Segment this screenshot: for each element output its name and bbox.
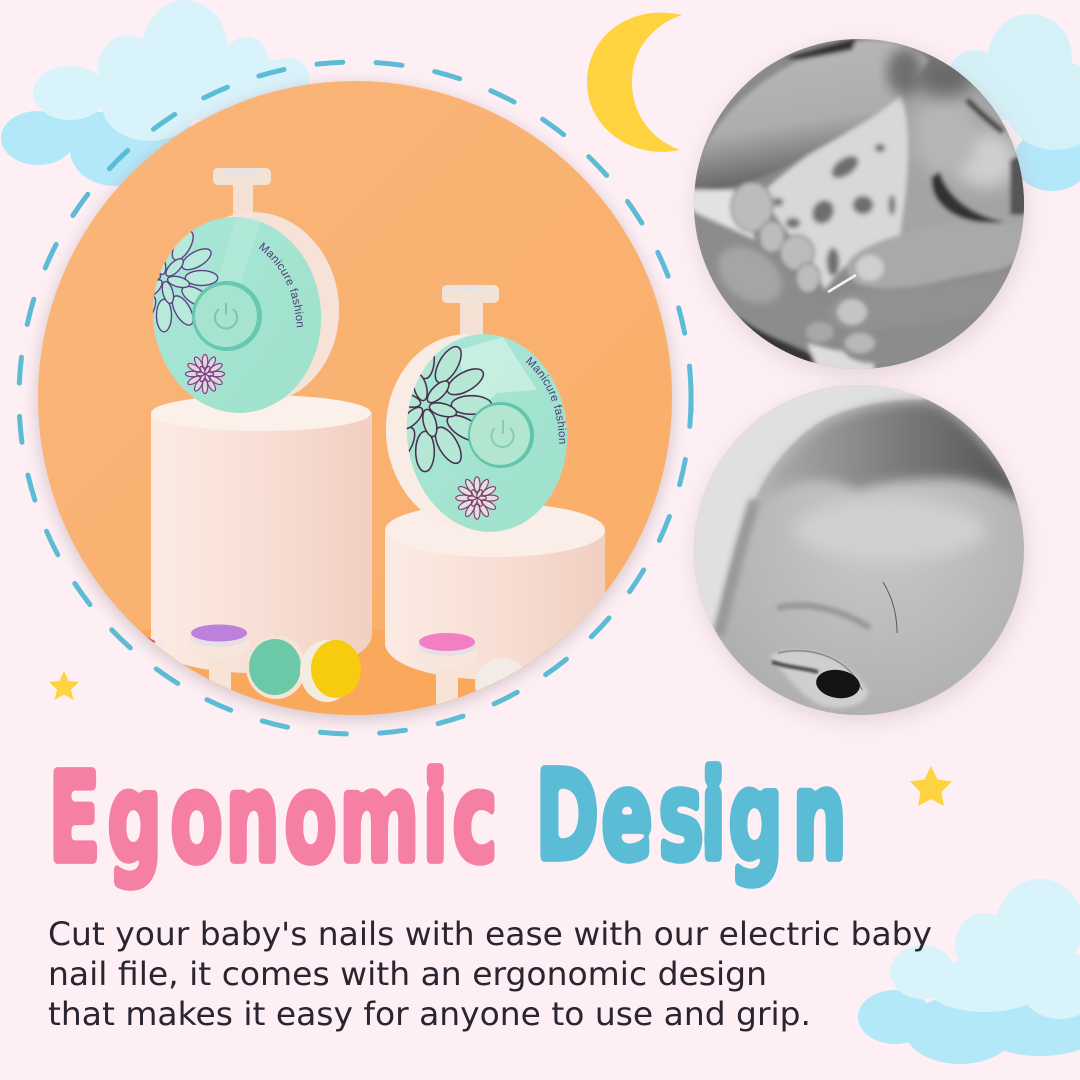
hand under foot [694,210,782,340]
pedestal: right [385,503,605,680]
tool [828,275,856,292]
flower ornament [152,231,218,332]
button [468,402,534,468]
icon: star right [910,766,952,806]
icon: power [215,303,237,328]
body text: that makes it easy for anyone to use and grip. [48,995,811,1033]
cloud: bottom right [858,879,1080,1064]
panel: baby face photo [690,380,1030,720]
title word: Design: Design [535,742,847,889]
clothing [760,95,908,290]
blanket [694,385,924,632]
dashed ring [19,62,691,734]
icon: star left [49,671,79,700]
floor [139,630,571,715]
pedestal: left [151,395,372,673]
button [192,281,262,351]
eye lid [770,651,868,708]
blanket [690,190,755,240]
mark [883,582,897,633]
device label: Manicure fashion [526,356,566,444]
finger top [846,222,1030,288]
blanket shadow [718,500,755,635]
device label: Manicure fashion [259,242,304,328]
panel: product photo [38,81,672,715]
main photo shadow [37,84,673,720]
small flower [456,477,498,519]
device: left trimmer [152,168,340,413]
nail file discs [146,624,522,704]
body text [48,915,932,1033]
title word: Egonomic: Egonomic [48,744,498,891]
highlight [797,503,985,556]
upper arm [690,40,928,190]
photo shadow [698,47,1024,719]
toes [731,182,820,293]
hair [752,403,1030,510]
highlight [217,218,262,284]
icon: crescent moon [587,13,682,152]
eyebrow [777,605,870,628]
body text: Cut your baby's nails with ease with our electric baby [48,915,932,953]
flower ornament [406,346,492,472]
finger middle [980,274,1008,316]
cloud: top left [1,0,310,186]
device: right trimmer [386,285,568,532]
cloud: top right [947,14,1080,191]
body text: nail file, it comes with an ergonomic design [48,955,767,993]
icon: power [491,420,514,447]
highlight [458,337,537,417]
baby face [900,80,1024,234]
eye [816,670,860,698]
small flower [185,354,225,394]
title [48,742,847,891]
finger bottom [842,334,961,366]
panel: baby foot photo [690,35,1030,378]
